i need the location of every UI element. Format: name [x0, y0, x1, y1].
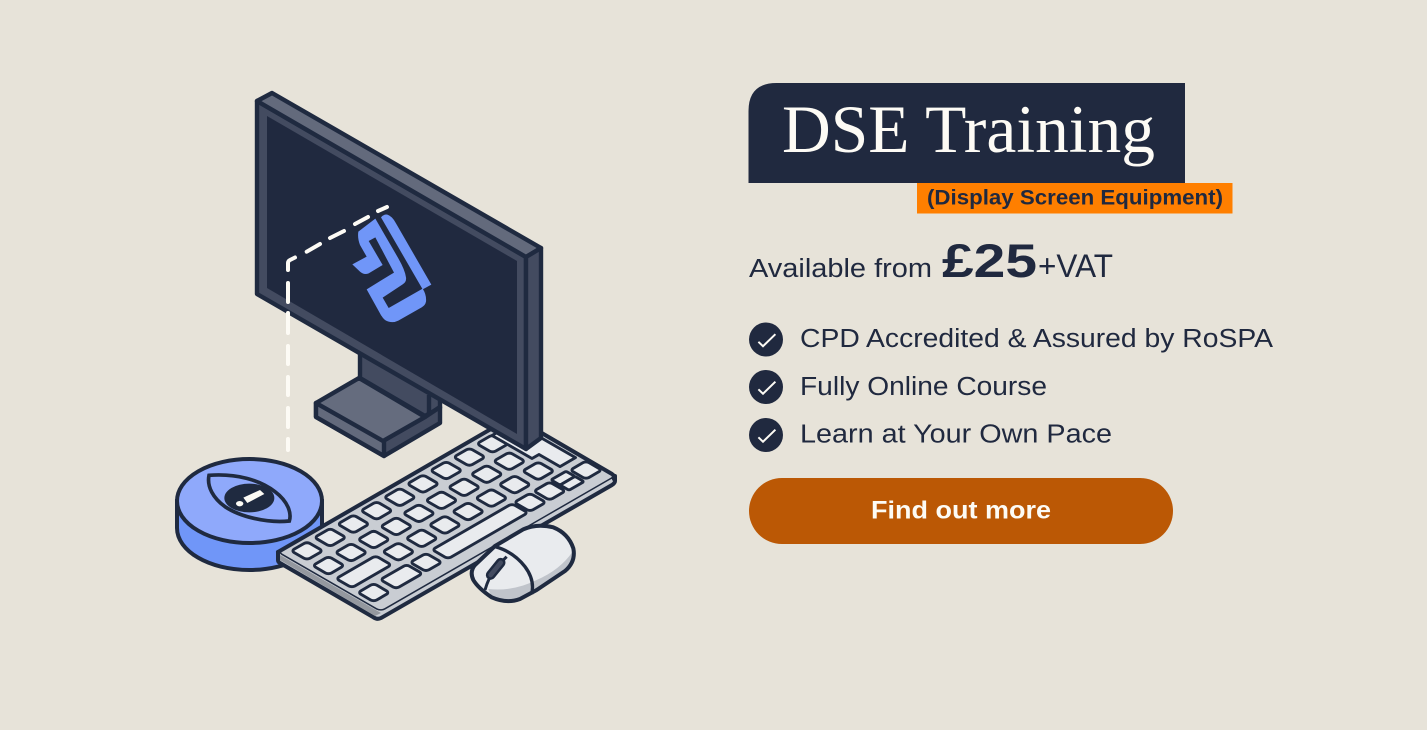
monitor stand	[316, 350, 440, 456]
price line	[749, 234, 1113, 287]
price line: £25	[942, 234, 1037, 287]
title block	[748, 83, 1185, 183]
icon: eye with exclamation mark	[209, 475, 290, 521]
price line: +VAT	[1038, 248, 1113, 284]
mouse scroll wheel	[491, 563, 501, 575]
feature: own pace	[749, 418, 1112, 452]
button: find out more: Find out more	[871, 496, 1051, 524]
dashed line connecting eye disk to screen	[288, 207, 387, 450]
price line: Available from	[749, 255, 932, 283]
icon: blue eye warning disk	[177, 459, 322, 570]
feature: CPD accreditation	[749, 322, 1273, 356]
keyboard keys	[288, 421, 603, 602]
feature: own pace: Learn at Your Own Pace	[800, 420, 1112, 448]
feature: fully online	[749, 370, 1047, 404]
monitor screen	[267, 116, 517, 434]
subtitle tag: (Display Screen Equipment)	[927, 186, 1223, 210]
feature: fully online: Fully Online Course	[800, 373, 1047, 401]
heading: DSE Training	[782, 91, 1155, 167]
blue logo on screen	[352, 215, 431, 322]
button: find out more	[749, 478, 1173, 544]
subtitle tag	[917, 183, 1232, 214]
feature list	[749, 322, 1273, 452]
keyboard	[278, 417, 615, 619]
illustration: computer workstation	[177, 93, 615, 619]
feature: CPD accreditation: CPD Accredited & Assured by RoSPA	[800, 325, 1273, 353]
computer mouse	[472, 526, 574, 601]
monitor	[257, 93, 541, 449]
